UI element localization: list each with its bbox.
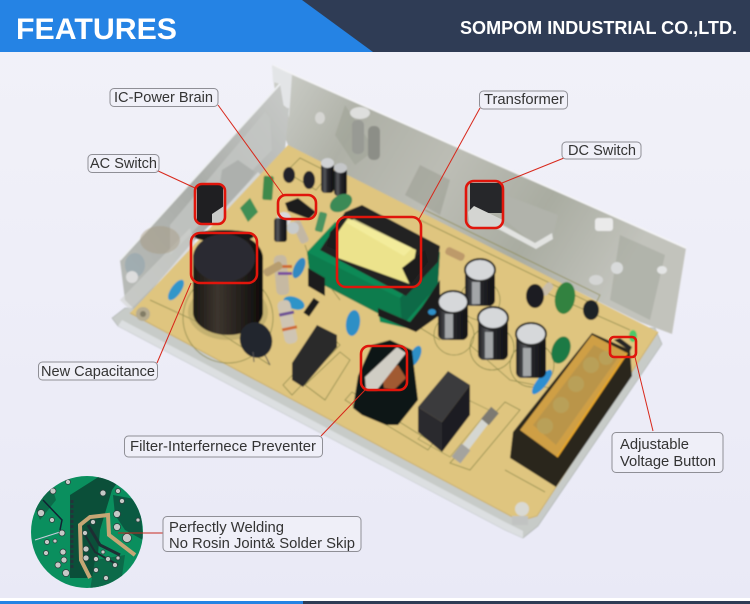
highlight: Adjustable Voltage Button (610, 337, 723, 472)
left wall (120, 84, 289, 310)
DC switch bracket (492, 190, 558, 245)
terminal block (510, 333, 632, 487)
circuit board (130, 145, 658, 521)
NTC thermistor (235, 318, 277, 365)
highlight: Transformer (337, 91, 568, 287)
highlight: Transformer: Transformer (484, 92, 564, 108)
screws (136, 307, 529, 525)
black suppression capacitors (292, 325, 470, 452)
power supply product illustration (112, 65, 686, 538)
highlight: AC Switch (88, 154, 225, 224)
electrolytic capacitors (438, 259, 546, 378)
transformer (307, 205, 440, 332)
silkscreen traces (150, 158, 630, 492)
highlight: New Capacitance (38, 233, 257, 380)
callout: solder detail: Perfectly Welding (169, 520, 284, 536)
highlight: IC-Power Brain: IC-Power Brain (114, 90, 213, 106)
back wall (272, 65, 686, 334)
highlight: IC-Power Brain (110, 88, 316, 219)
header band (0, 0, 750, 52)
solder detail circle (30, 476, 143, 590)
filter choke (353, 340, 418, 425)
company name: SOMPOM INDUSTRIAL CO.,LTD. (460, 18, 737, 38)
small components upper area (165, 158, 637, 397)
AC switch bracket (217, 160, 255, 222)
big capacitor (188, 230, 268, 340)
highlight: DC Switch: DC Switch (568, 143, 636, 159)
highlight: Adjustable Voltage Button: Adjustable (620, 437, 689, 453)
highlight: Adjustable Voltage Button: Voltage Button (620, 454, 716, 470)
callout: solder detail (118, 516, 361, 552)
highlight: DC Switch (466, 142, 641, 228)
base plate (112, 308, 662, 538)
trimmer (614, 338, 632, 351)
highlight: AC Switch: AC Switch (90, 156, 157, 172)
highlight: New Capacitance: New Capacitance (41, 364, 155, 380)
footer band (0, 598, 750, 604)
title: FEATURES (16, 13, 177, 46)
callout: solder detail: No Rosin Joint& Solder Skip (169, 536, 355, 552)
fuse (456, 410, 495, 460)
highlight: Filter-Interfernece Preventer (124, 346, 407, 457)
highlight: Filter-Interfernece Preventer: Filter-Interfernece Preventer (130, 439, 316, 455)
